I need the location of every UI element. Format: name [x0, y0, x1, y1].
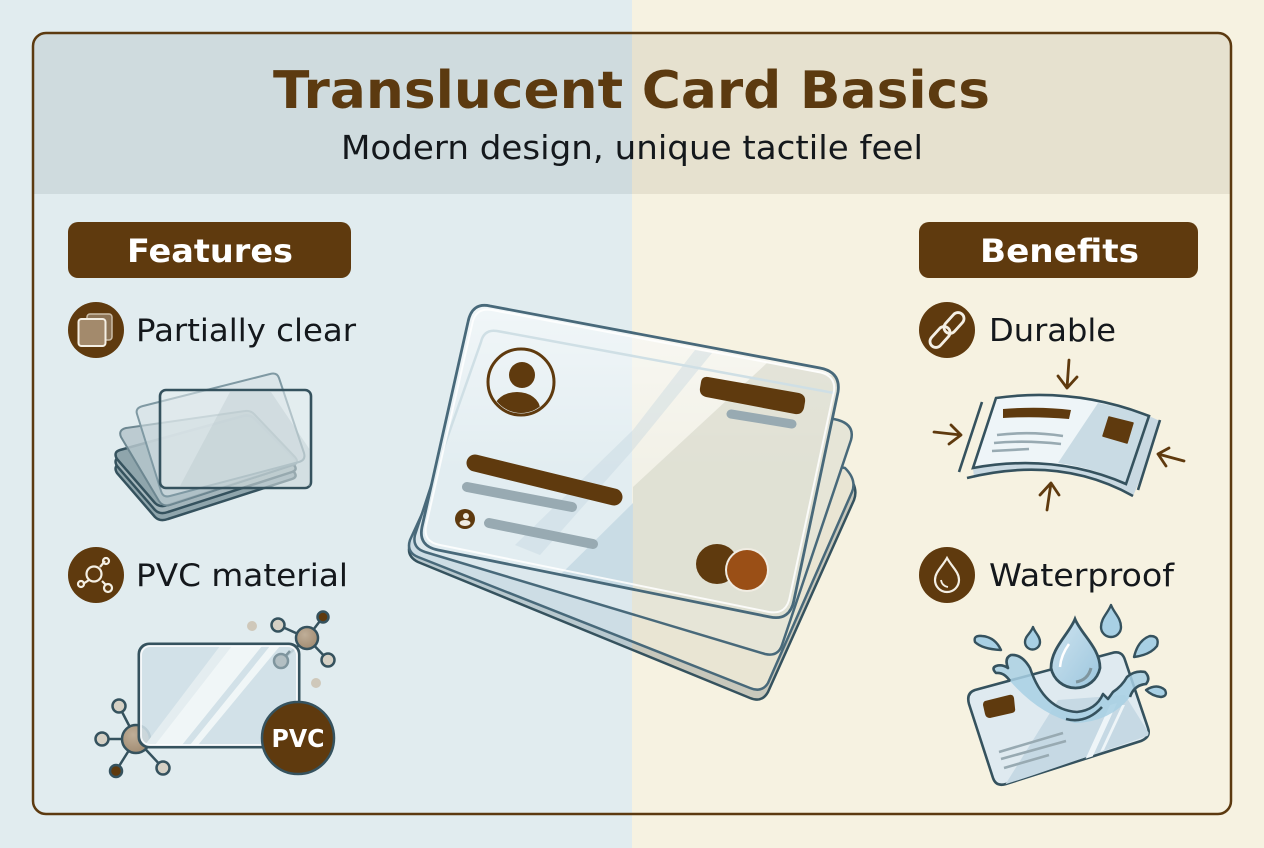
heading: features: Features [127, 232, 293, 270]
icon: water drop [919, 547, 975, 603]
right bars [700, 377, 805, 424]
avatar [488, 349, 554, 426]
splash [994, 655, 1148, 723]
molecule lower left [96, 700, 170, 777]
title: Translucent Card Basics [273, 61, 990, 121]
label: durable: Durable [989, 313, 1116, 349]
left bars [467, 463, 614, 544]
card [968, 652, 1149, 785]
pale particles [247, 621, 321, 688]
pvc badge [262, 702, 334, 774]
label: waterproof: Waterproof [989, 558, 1175, 594]
label: partially clear: Partially clear [136, 313, 356, 349]
top card [410, 300, 850, 625]
chip [983, 695, 1015, 718]
heading: benefits [919, 222, 1198, 278]
coins [696, 544, 769, 592]
bottom card [409, 400, 853, 690]
heading: benefits: Benefits [980, 232, 1139, 270]
pvc badge: PVC [272, 724, 324, 753]
icon: chain link [919, 302, 975, 358]
subtitle: Modern design, unique tactile feel [341, 128, 923, 167]
large drop [1051, 619, 1100, 688]
panel: features [68, 222, 356, 777]
small droplets [975, 605, 1166, 697]
header band [33, 33, 1231, 194]
illustration: bent card with arrows [934, 360, 1184, 510]
illustration: fanned translucent cards [116, 374, 311, 520]
illustration: card with splash [968, 605, 1166, 785]
illustration: pvc card with molecules [96, 612, 334, 777]
small user icon [455, 509, 475, 529]
label: pvc material: PVC material [136, 558, 348, 594]
middle card [414, 340, 852, 655]
arrows [934, 360, 1184, 510]
icon: overlapping squares [68, 302, 124, 358]
icon: molecule [68, 547, 124, 603]
heading: features [68, 222, 351, 278]
central card stack [409, 300, 855, 700]
panel: benefits [919, 222, 1198, 785]
pvc card [139, 644, 299, 747]
molecule upper right [272, 612, 334, 666]
card thickness [409, 405, 855, 700]
